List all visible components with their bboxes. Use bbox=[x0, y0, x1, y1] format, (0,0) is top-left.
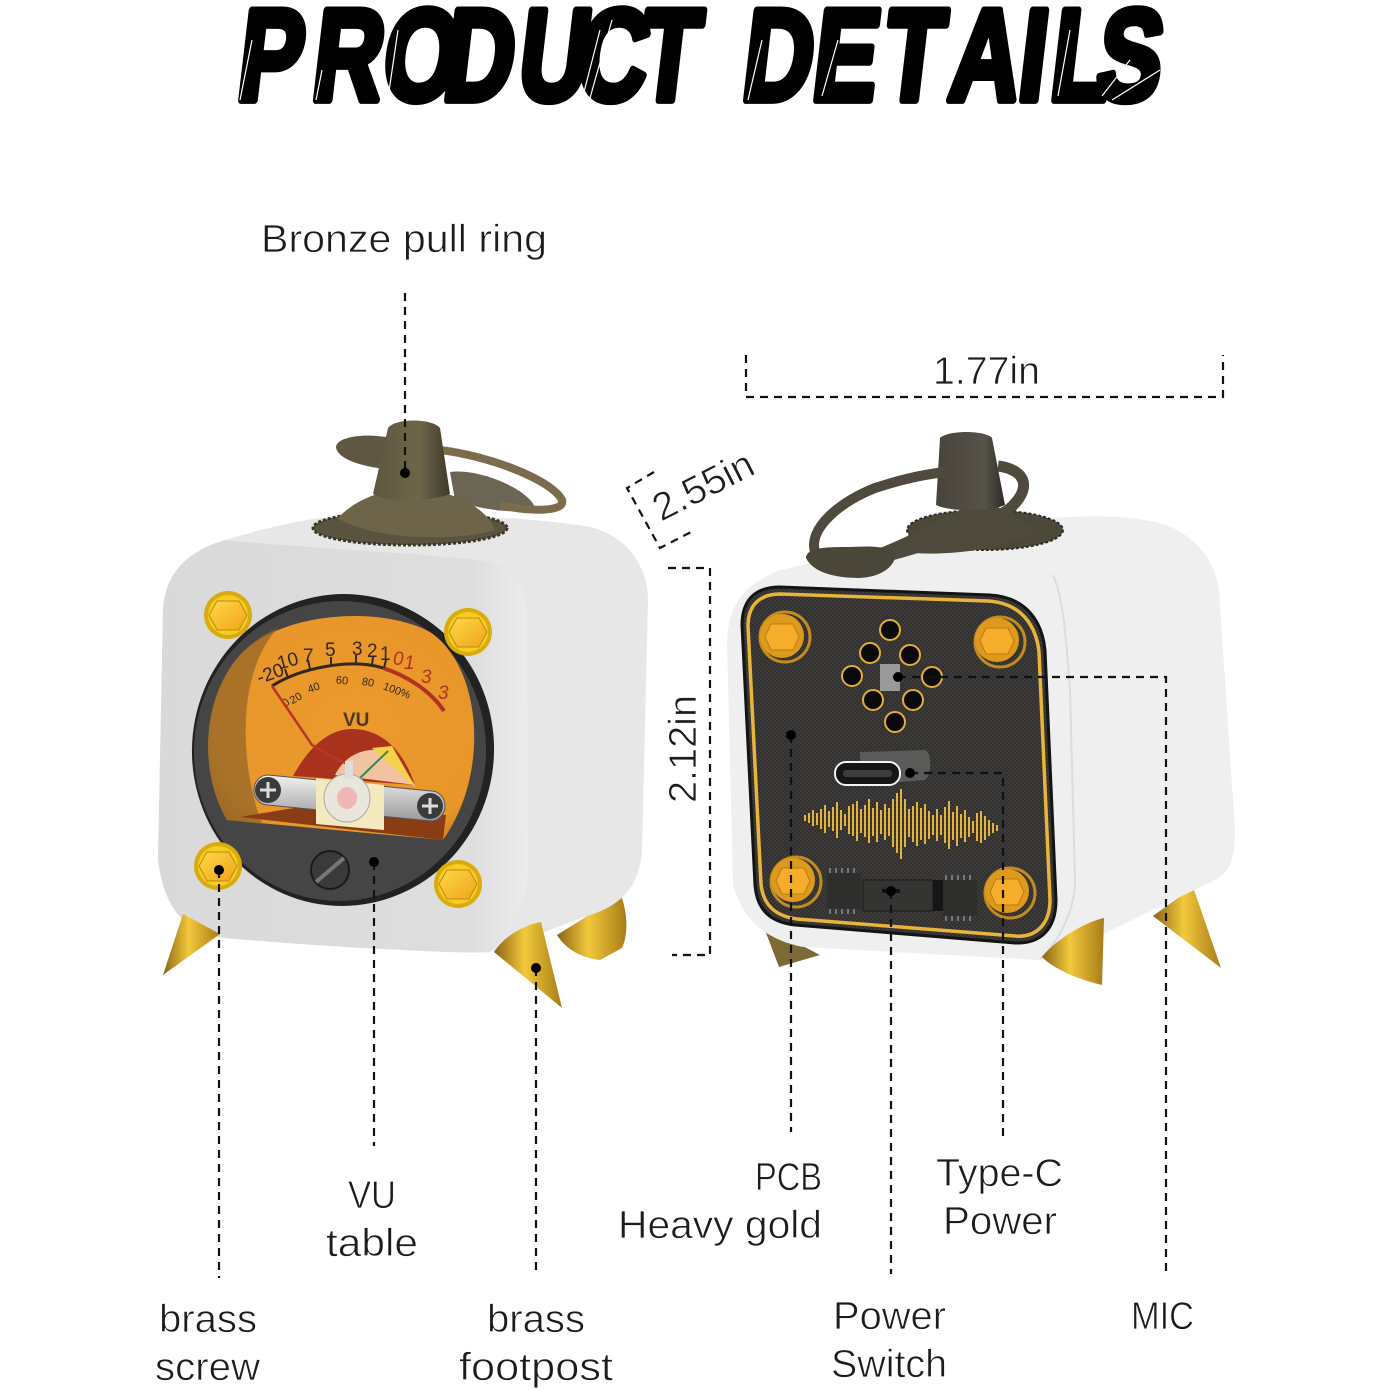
scale numbers: 1 bbox=[404, 653, 415, 674]
label: power switch: Switch bbox=[831, 1343, 947, 1386]
meter bbox=[177, 579, 509, 921]
scale numbers: 3 bbox=[352, 639, 363, 660]
scale numbers: 2 bbox=[367, 641, 378, 662]
bar screws bbox=[255, 777, 281, 803]
label: power switch: Power bbox=[833, 1295, 946, 1338]
label: PCB heavy gold bbox=[618, 1156, 822, 1247]
dimension bracket: width bbox=[746, 355, 1223, 397]
USB-C connector bbox=[835, 750, 930, 785]
dashed leader: PCB bbox=[786, 730, 796, 1132]
dashed leader: Type-C bbox=[905, 768, 1003, 1137]
gold panel screws bbox=[760, 612, 1035, 918]
label: bronze pull ring: Bronze pull ring bbox=[261, 218, 547, 261]
spike front right bbox=[494, 922, 562, 1008]
dial face bbox=[208, 616, 474, 840]
dimension bracket: depth bbox=[627, 472, 695, 548]
spike back left bbox=[763, 925, 820, 967]
percent numbers: 40 bbox=[306, 680, 322, 696]
body bbox=[158, 515, 648, 953]
bottom shadow band bbox=[240, 807, 446, 840]
label: VU table bbox=[326, 1174, 418, 1265]
scale numbers: 3 bbox=[438, 683, 449, 704]
label: MIC: MIC bbox=[1131, 1295, 1194, 1338]
spike back right bbox=[557, 895, 626, 960]
label: brass footpost: brass bbox=[487, 1298, 585, 1341]
label: Type-C power: Type-C bbox=[936, 1152, 1063, 1195]
percent numbers: 0 bbox=[280, 696, 292, 709]
dashed leader: VU table bbox=[369, 857, 379, 1146]
sound waveform bbox=[805, 789, 997, 859]
dashed leader: MIC bbox=[893, 672, 1166, 1274]
label: depth dimension: 2.55in bbox=[646, 443, 761, 530]
scale numbers: 0 bbox=[393, 649, 404, 670]
scale numbers: -20 bbox=[254, 660, 287, 689]
dashed leader: bronze pull ring bbox=[400, 293, 410, 478]
label: height dimension: 2.12in bbox=[662, 695, 705, 803]
label: width dimension: 1.77in bbox=[933, 350, 1040, 393]
meter center bbox=[316, 778, 384, 830]
label: Type-C power bbox=[936, 1152, 1063, 1243]
spike front left bbox=[163, 914, 220, 975]
label: brass screw bbox=[155, 1298, 261, 1389]
scale numbers: 7 bbox=[303, 646, 314, 667]
label: VU table: VU bbox=[348, 1174, 396, 1217]
PCB panel bbox=[742, 587, 1056, 943]
percent numbers: 60 bbox=[335, 674, 349, 688]
dashed leader: brass screw bbox=[214, 865, 224, 1278]
label: brass footpost: footpost bbox=[459, 1346, 613, 1389]
scale numbers: 3 bbox=[421, 667, 432, 688]
body bbox=[727, 516, 1235, 960]
label: PCB heavy gold: Heavy gold bbox=[618, 1204, 822, 1247]
device: back view with PCB panel bbox=[727, 432, 1235, 985]
label: brass screw: brass bbox=[159, 1298, 257, 1341]
dimension bracket: height bbox=[668, 568, 710, 955]
label: brass footpost bbox=[459, 1298, 613, 1389]
microphone chip bbox=[880, 664, 900, 691]
label: brass screw: screw bbox=[155, 1346, 261, 1389]
speaker holes bbox=[842, 620, 942, 732]
percent numbers: 80 bbox=[361, 676, 375, 690]
spike front right bbox=[1042, 918, 1104, 985]
VU label: VU bbox=[343, 710, 369, 731]
percent numbers: 20 bbox=[288, 690, 304, 707]
scale numbers: 10 bbox=[275, 649, 301, 674]
chips and power switch bbox=[827, 868, 977, 921]
scale numbers: 1 bbox=[380, 644, 391, 665]
label: Type-C power: Power bbox=[943, 1200, 1057, 1243]
label: VU table: table bbox=[326, 1222, 418, 1265]
bronze pull ring bbox=[313, 420, 562, 545]
dashed leader: power switch bbox=[886, 886, 896, 1274]
device: front view with VU meter bbox=[155, 218, 1235, 1389]
adjust knob bbox=[311, 851, 349, 889]
brass screws bbox=[194, 591, 492, 908]
scale numbers: 5 bbox=[325, 640, 336, 661]
silver bar bbox=[254, 775, 445, 821]
red arch bbox=[293, 729, 415, 785]
scale numbers bbox=[254, 639, 449, 704]
scale arc bbox=[272, 664, 383, 686]
percent numbers: 100% bbox=[381, 681, 412, 702]
label: power switch bbox=[831, 1295, 947, 1386]
spike back right bbox=[1153, 887, 1221, 968]
bronze pull ring bbox=[806, 432, 1063, 578]
dashed leader: brass footpost bbox=[531, 963, 541, 1276]
label: PCB heavy gold: PCB bbox=[755, 1156, 822, 1199]
percent numbers bbox=[280, 674, 412, 709]
